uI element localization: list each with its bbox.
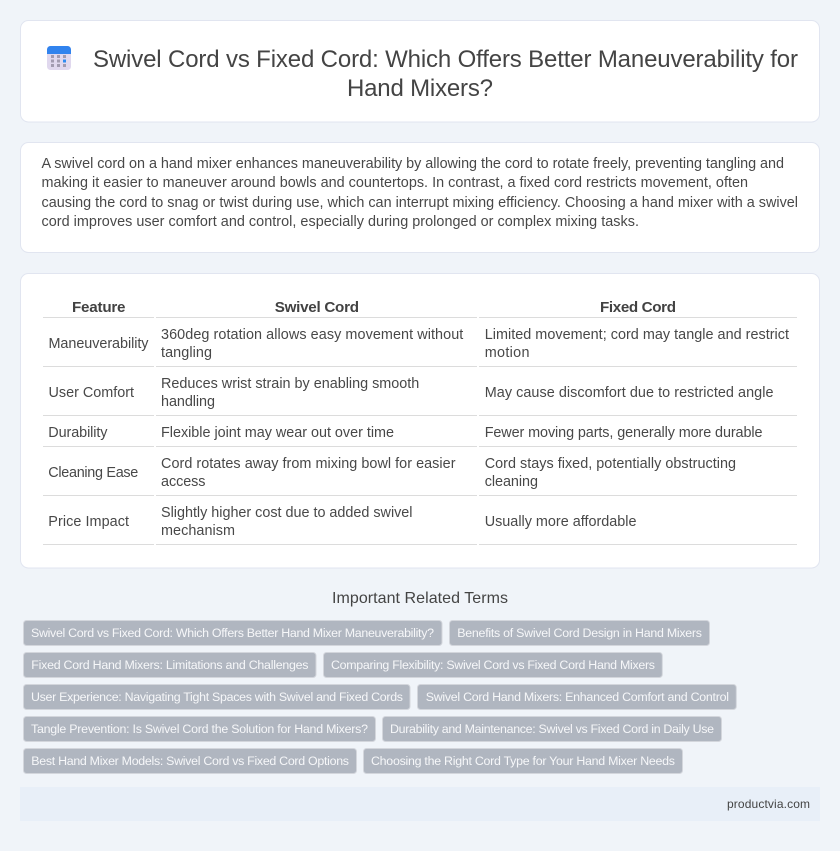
row: maneuverability — [48, 327, 789, 361]
row: cleaning ease: Cleaning Ease — [48, 465, 138, 481]
row: price impact — [48, 505, 637, 539]
row: maneuverability: Maneuverability — [48, 336, 149, 352]
row: maneuverability: tangling — [161, 345, 212, 361]
tag — [418, 684, 736, 710]
tag — [24, 620, 442, 646]
panel: introduction text: A swivel cord on a hand mixer enhances maneuverability by allowing the cord to rotate freely, preventing tangling and — [42, 156, 784, 172]
panel: introduction text: making it easier to maneuver around bowls and countertops. In contrast, a fixed cord restricts movement, often — [42, 175, 748, 191]
row: durability: Durability — [48, 425, 108, 441]
tag — [24, 652, 316, 678]
row: maneuverability: Limited movement; cord may tangle and restrict — [485, 327, 789, 343]
tag — [24, 716, 376, 742]
row: cleaning ease: cleaning — [485, 474, 538, 490]
tag: Comparing Flexibility: Swivel Cord vs Fixed Cord Hand Mixers — [331, 658, 655, 672]
icon: calendar — [47, 46, 71, 70]
row: user comfort: Reduces wrist strain by enabling smooth — [161, 376, 419, 392]
tag — [324, 652, 662, 678]
table header row: Feature — [72, 299, 126, 316]
row: cleaning ease: Cord rotates away from mixing bowl for easier — [161, 456, 456, 472]
title: Hand Mixers? — [347, 75, 493, 102]
table header row — [72, 299, 676, 316]
table header row: Swivel Cord — [275, 299, 359, 316]
row: user comfort: handling — [161, 394, 215, 410]
row: cleaning ease: access — [161, 474, 206, 490]
table header row: Fixed Cord — [600, 299, 676, 316]
row: price impact: Usually more affordable — [485, 514, 636, 530]
tag: Best Hand Mixer Models: Swivel Cord vs Fixed Cord Options — [31, 754, 349, 768]
tag: Durability and Maintenance: Swivel vs Fixed Cord in Daily Use — [390, 722, 714, 736]
tag: Swivel Cord Hand Mixers: Enhanced Comfort and Control — [426, 690, 729, 704]
tag — [382, 716, 722, 742]
tag list — [24, 620, 736, 774]
row: price impact: Slightly higher cost due to added swivel — [161, 505, 412, 521]
row: user comfort: User Comfort — [48, 385, 134, 401]
footer — [20, 787, 820, 821]
panel: introduction text: cord improves user comfort and control, especially during prolonged or complex mixing tasks. — [42, 214, 639, 230]
row: maneuverability: 360deg rotation allows easy movement without — [161, 327, 463, 343]
tag: Benefits of Swivel Cord Design in Hand Mixers — [457, 626, 702, 640]
row: price impact: mechanism — [161, 523, 235, 539]
row: user comfort: May cause discomfort due to restricted angle — [485, 385, 774, 401]
tag: User Experience: Navigating Tight Spaces with Swivel and Fixed Cords — [31, 690, 403, 704]
row: durability: Fewer moving parts, generally more durable — [485, 425, 762, 441]
row: user comfort — [48, 376, 774, 410]
tag: Tangle Prevention: Is Swivel Cord the Solution for Hand Mixers? — [31, 722, 368, 736]
tag: Swivel Cord vs Fixed Cord: Which Offers Better Hand Mixer Maneuverability? — [31, 626, 434, 640]
panel: introduction text — [20, 142, 820, 252]
row: cleaning ease: Cord stays fixed, potentially obstructing — [485, 456, 736, 472]
panel: header — [20, 20, 820, 122]
tag — [24, 684, 410, 710]
row: durability: Flexible joint may wear out over time — [161, 425, 394, 441]
tag — [24, 748, 356, 774]
tag: Choosing the Right Cord Type for Your Hand Mixer Needs — [371, 754, 675, 768]
tag — [364, 748, 682, 774]
row: price impact: Price Impact — [48, 514, 129, 530]
title: Swivel Cord vs Fixed Cord: Which Offers Better Maneuverability for — [93, 46, 798, 73]
panel: comparison table — [20, 274, 820, 568]
heading: important related terms: Important Related Terms — [332, 590, 508, 607]
tag — [450, 620, 710, 646]
row: cleaning ease — [48, 456, 736, 490]
footer: productvia.com — [727, 797, 810, 811]
title — [93, 46, 798, 102]
row: maneuverability: motion — [485, 345, 530, 361]
row: durability — [48, 425, 763, 441]
tag: Fixed Cord Hand Mixers: Limitations and Challenges — [31, 658, 309, 672]
panel: introduction text: causing the cord to snag or twist during use, which can interrupt mixing efficiency. Choosing a hand mixer with a swivel — [42, 195, 798, 211]
